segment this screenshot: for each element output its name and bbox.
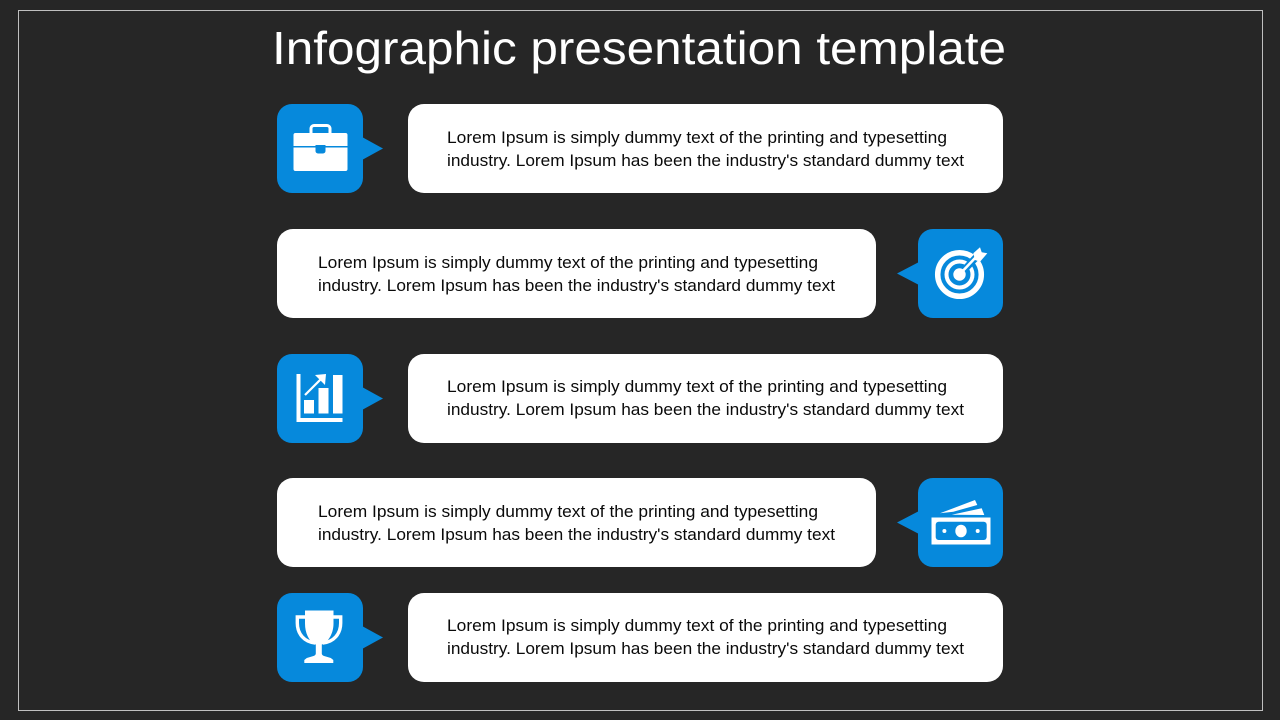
- row 3: chart item: [277, 354, 1003, 443]
- text card: industry. Lorem Ipsum has been the industry's standard dummy text: [447, 400, 964, 419]
- text card: Lorem Ipsum is simply dummy text of the printing and typesetting: [447, 616, 947, 635]
- icon tile: briefcase: [277, 104, 383, 193]
- text card: industry. Lorem Ipsum has been the industry's standard dummy text: [447, 151, 964, 170]
- text card: Lorem Ipsum is simply dummy text of the printing and typesetting: [447, 128, 947, 147]
- text card: Lorem Ipsum is simply dummy text of the printing and typesetting: [447, 377, 947, 396]
- row 1: briefcase item: [277, 104, 1003, 193]
- text card: [277, 478, 876, 567]
- icon tile: bar chart: [277, 354, 383, 443]
- text card: [408, 593, 1003, 682]
- title: Infographic presentation template: [272, 22, 1006, 74]
- text card: industry. Lorem Ipsum has been the industry's standard dummy text: [447, 639, 964, 658]
- icon tile: target: [897, 229, 1003, 318]
- row 2: target item: [277, 229, 1003, 318]
- icon tile: banknotes: [897, 478, 1003, 567]
- icon tile: trophy: [277, 593, 383, 682]
- text card: [277, 229, 876, 318]
- text card: Lorem Ipsum is simply dummy text of the printing and typesetting: [318, 502, 818, 521]
- text card: industry. Lorem Ipsum has been the industry's standard dummy text: [318, 525, 835, 544]
- text card: [408, 354, 1003, 443]
- text card: [408, 104, 1003, 193]
- row 4: money item: [277, 478, 1003, 567]
- text card: industry. Lorem Ipsum has been the industry's standard dummy text: [318, 276, 835, 295]
- text card: Lorem Ipsum is simply dummy text of the printing and typesetting: [318, 253, 818, 272]
- row 5: trophy item: [277, 593, 1003, 682]
